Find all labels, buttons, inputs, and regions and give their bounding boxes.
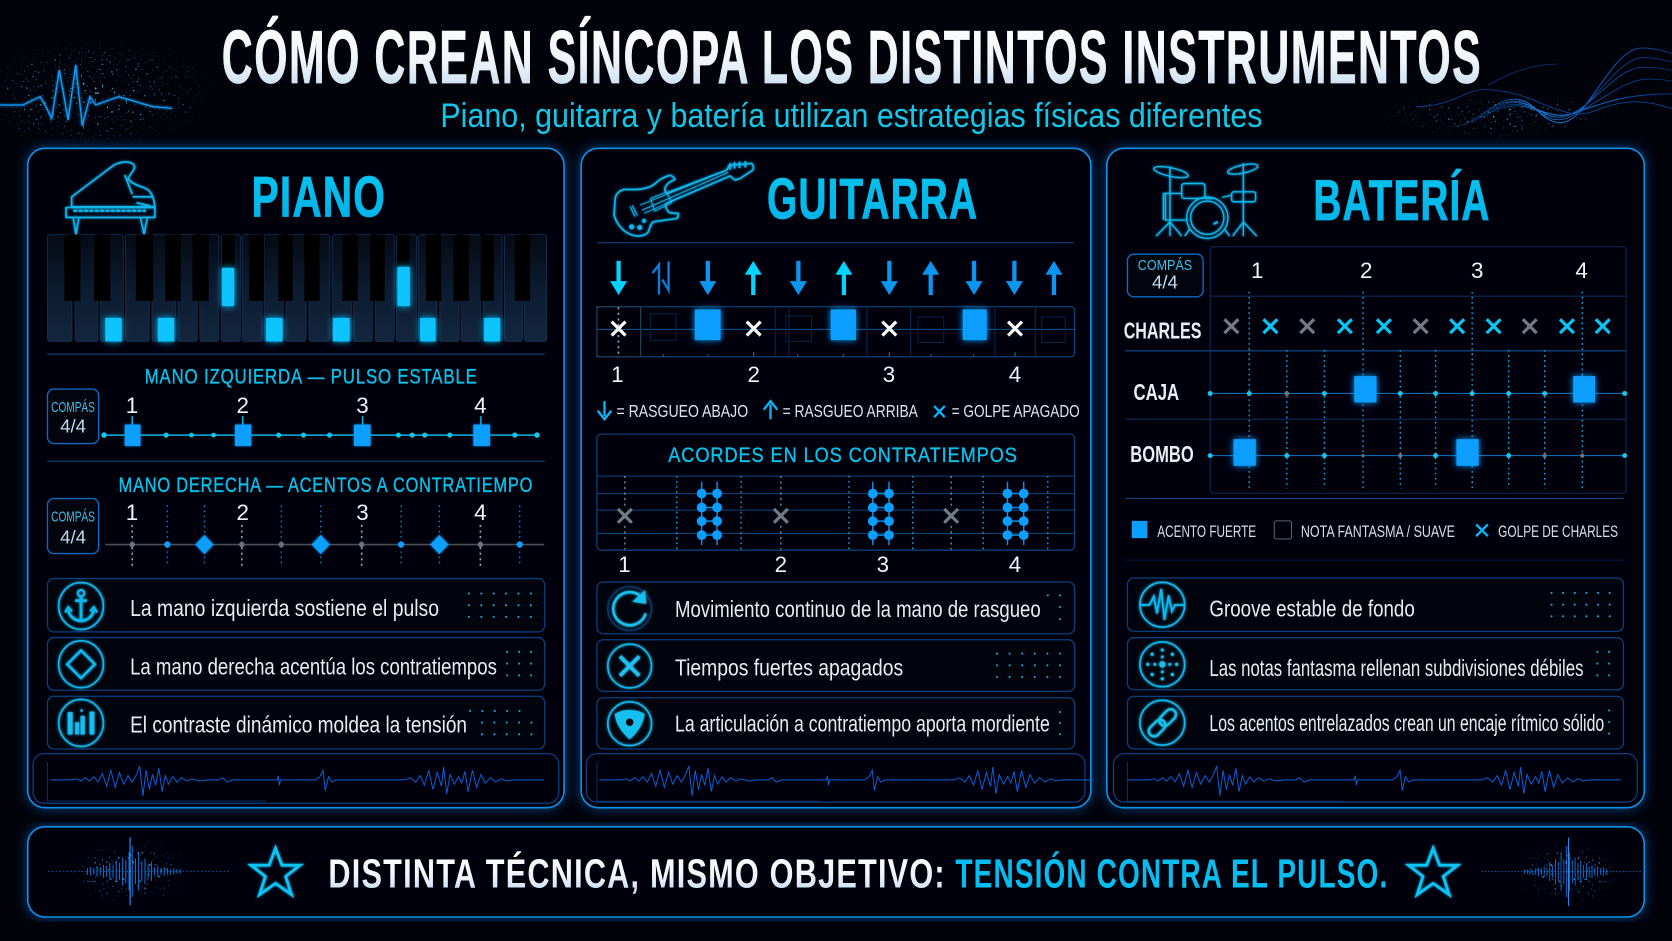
drum beat numbers (1251, 258, 1588, 283)
drum legend: NOTA FANTASMA / SUAVE (1301, 522, 1455, 541)
drum beat numbers: 4 (1575, 258, 1588, 283)
decoration: pulse and particles left (0, 40, 213, 146)
row: offbeat articulation: La articulación a contratiempo aporta mordiente (675, 710, 1050, 736)
strum legend: = RASGUEO ARRIBA (783, 401, 918, 421)
drum legend: GOLPE DE CHARLES (1498, 522, 1618, 541)
piano panel frame (28, 148, 564, 808)
right hand rhythm track: 2 (236, 500, 249, 525)
heading: GUITARRA: GUITARRA (767, 167, 978, 231)
row labels (1124, 317, 1201, 467)
beat numbers: 3 (883, 362, 895, 387)
panel: drums (1107, 148, 1644, 808)
icon: muted x (608, 644, 652, 688)
left hand rhythm track: 4 (474, 393, 487, 418)
drum legend (1132, 521, 1618, 541)
chord box (597, 434, 1075, 550)
right burst waveform (1481, 835, 1641, 908)
strum legend: = RASGUEO ABAJO (617, 401, 748, 421)
icon: radial dots (1140, 642, 1185, 687)
panel: piano (28, 148, 564, 808)
strum arrows (610, 261, 1062, 295)
drums panel frame (1107, 148, 1644, 808)
badge: time signature: 4/4 (60, 416, 86, 437)
left burst waveform (48, 835, 229, 908)
drum grid (1125, 247, 1627, 493)
right hand rhythm track (105, 500, 544, 567)
icon: chain link (1140, 700, 1185, 745)
chord beat numbers: 2 (775, 552, 787, 577)
beat numbers: 4 (1009, 362, 1021, 387)
waveform strip (33, 754, 559, 803)
banner text: DISTINTA TÉCNICA, MISMO OBJETIVO: (328, 851, 946, 897)
beat numbers: 1 (611, 362, 624, 387)
icon: guitar pick (608, 702, 652, 746)
chord beat numbers: 1 (618, 552, 631, 577)
row: steady groove (1127, 578, 1623, 631)
banner: conclusion (28, 827, 1644, 917)
badge: time signature: COMPÁS (51, 508, 95, 525)
icon: anchor (59, 583, 103, 629)
row labels: CHARLES (1124, 317, 1201, 343)
row: dynamic contrast (47, 696, 545, 749)
icon: loop arrow (608, 587, 652, 631)
strum legend (598, 401, 1080, 421)
left hand rhythm track (101, 393, 540, 446)
row: interlocking accents (1127, 696, 1623, 749)
icon: right star (1409, 848, 1458, 895)
badge: time signature: 4/4 (1152, 271, 1178, 292)
badge: time signature: 4/4 (60, 527, 86, 548)
row: left hand holds the pulse: La mano izquierda sostiene el pulso (130, 595, 439, 621)
row: offbeat articulation (597, 698, 1075, 749)
icon: left star (251, 848, 300, 895)
waveform strip (1114, 754, 1637, 802)
chord beat numbers: 4 (1009, 552, 1021, 577)
heading: right hand: MANO DERECHA — ACENTOS A CONTRATIEMPO (119, 473, 533, 497)
right hand rhythm track: 3 (356, 500, 369, 525)
drum beat numbers: 2 (1360, 258, 1373, 283)
row: continuous motion (597, 582, 1075, 634)
icon: diamond (59, 641, 103, 688)
panel: guitar (581, 148, 1093, 808)
banner text: TENSIÓN CONTRA EL PULSO. (955, 851, 1388, 897)
row labels: BOMBO (1130, 441, 1194, 467)
decoration: flowing lines right (1376, 48, 1672, 139)
badge: time signature: COMPÁS (51, 399, 95, 416)
chord beat numbers (618, 552, 1021, 577)
row: muted downbeats: Tiempos fuertes apagados (675, 654, 903, 680)
guitar panel frame (581, 148, 1091, 808)
icon: bars (59, 699, 103, 746)
icon: grand piano (66, 162, 155, 235)
beat numbers (611, 362, 1021, 387)
drum beat numbers: 1 (1251, 258, 1263, 283)
banner frame (28, 827, 1644, 917)
badge: time signature (47, 389, 99, 444)
left hand rhythm track: 2 (236, 393, 249, 418)
drum legend: ACENTO FUERTE (1157, 522, 1256, 541)
strum grid (597, 307, 1075, 357)
subtitle: Piano, guitarra y batería utilizan estrategias físicas diferentes (440, 97, 1263, 135)
row: muted downbeats (597, 640, 1075, 691)
row: ghost notes (1127, 638, 1623, 690)
row: continuous motion: Movimiento continuo de la mano de rasgueo (675, 596, 1041, 622)
heading: BATERÍA: BATERÍA (1313, 169, 1490, 233)
right hand rhythm track: 1 (126, 500, 138, 525)
heading: left hand: MANO IZQUIERDA — PULSO ESTABLE (145, 364, 478, 388)
icon: electric guitar (614, 161, 753, 236)
strum legend: = GOLPE APAGADO (952, 401, 1080, 421)
piano keyboard (47, 235, 547, 341)
hi-hat marks (1224, 319, 1610, 333)
row: right hand accents offbeats: La mano derecha acentúa los contratiempos (130, 653, 497, 679)
heading: chords: ACORDES EN LOS CONTRATIEMPOS (668, 443, 1018, 467)
icon: pulse (1140, 582, 1185, 627)
right hand rhythm track: 4 (474, 500, 487, 525)
drum beat numbers: 3 (1471, 258, 1483, 283)
chord beat numbers: 3 (877, 552, 889, 577)
left hand rhythm track: 1 (126, 393, 138, 418)
badge: time signature: COMPÁS (1138, 257, 1192, 274)
badge: time signature (47, 499, 99, 554)
icon: drum kit (1153, 162, 1259, 238)
row: right hand accents offbeats (47, 638, 545, 690)
waveform strip (586, 754, 1093, 802)
row: steady groove: Groove estable de fondo (1209, 595, 1415, 621)
left hand rhythm track: 3 (356, 393, 369, 418)
badge: time signature (1127, 254, 1203, 297)
row labels: CAJA (1134, 379, 1179, 405)
row: left hand holds the pulse (47, 579, 545, 632)
row: dynamic contrast: El contraste dinámico moldea la tensión (130, 711, 467, 737)
beat numbers: 2 (747, 362, 760, 387)
heading: PIANO: PIANO (252, 166, 386, 230)
